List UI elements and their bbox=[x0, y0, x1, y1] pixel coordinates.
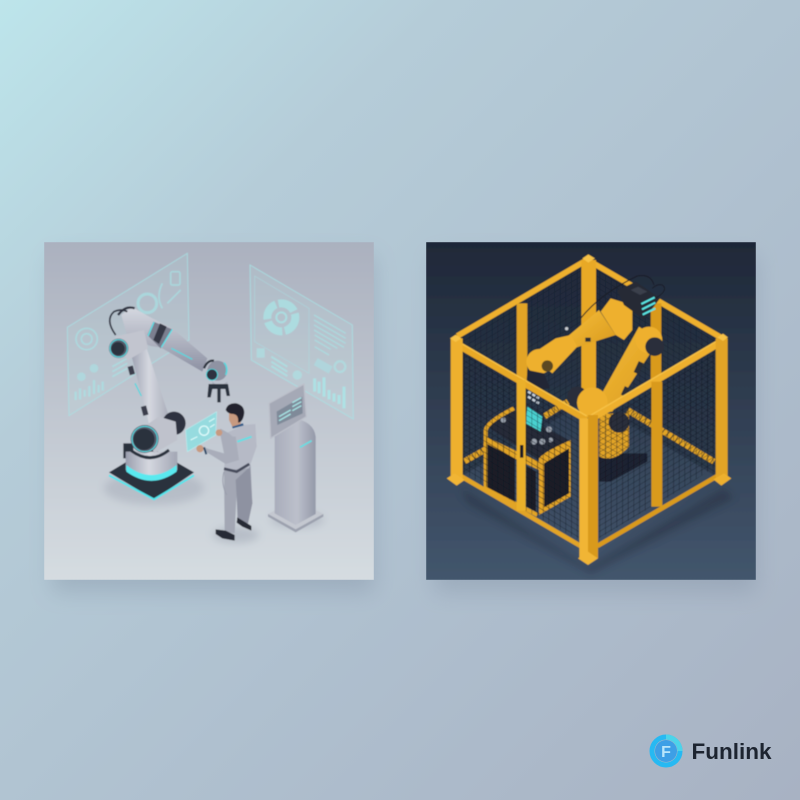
robot arm bbox=[104, 307, 230, 505]
floor shadow bbox=[461, 488, 734, 573]
elbow joint bbox=[636, 327, 662, 353]
lower arm bbox=[130, 348, 172, 443]
wrist and gripper bbox=[204, 361, 230, 402]
front fence bbox=[447, 334, 731, 565]
elbow joint bbox=[115, 330, 148, 361]
back fence bbox=[455, 254, 723, 480]
top rails bbox=[457, 345, 587, 420]
post caps and feet bbox=[450, 335, 461, 342]
arms bbox=[203, 437, 239, 464]
panel: caged industrial robot bbox=[426, 242, 756, 580]
workbench bbox=[486, 392, 571, 515]
control kiosk bbox=[268, 384, 324, 532]
hologram: left dashboard bbox=[67, 253, 189, 416]
tablet bbox=[186, 412, 217, 452]
head bbox=[229, 412, 241, 427]
logo icon: F bbox=[661, 744, 671, 761]
legs and shoes bbox=[224, 465, 252, 533]
hologram: right dashboard bbox=[250, 265, 353, 419]
forearm bbox=[121, 307, 207, 372]
shoulder joint bbox=[567, 387, 587, 407]
upper arm bbox=[591, 327, 659, 413]
shoulder joints bbox=[162, 412, 186, 435]
panel shadows bbox=[52, 256, 756, 592]
robot pedestal bbox=[599, 413, 647, 482]
logo wordmark: Funlink bbox=[692, 739, 772, 764]
yellow robot bbox=[526, 276, 665, 482]
operator with tablet bbox=[186, 403, 259, 543]
logo: Funlink bbox=[652, 737, 772, 765]
posts bbox=[517, 380, 526, 511]
forearm and wrist bbox=[526, 276, 665, 390]
torso bbox=[224, 424, 257, 470]
panel: collaborative robot with operator bbox=[44, 242, 374, 580]
robot base bbox=[109, 443, 194, 499]
bottom rails bbox=[461, 476, 581, 546]
